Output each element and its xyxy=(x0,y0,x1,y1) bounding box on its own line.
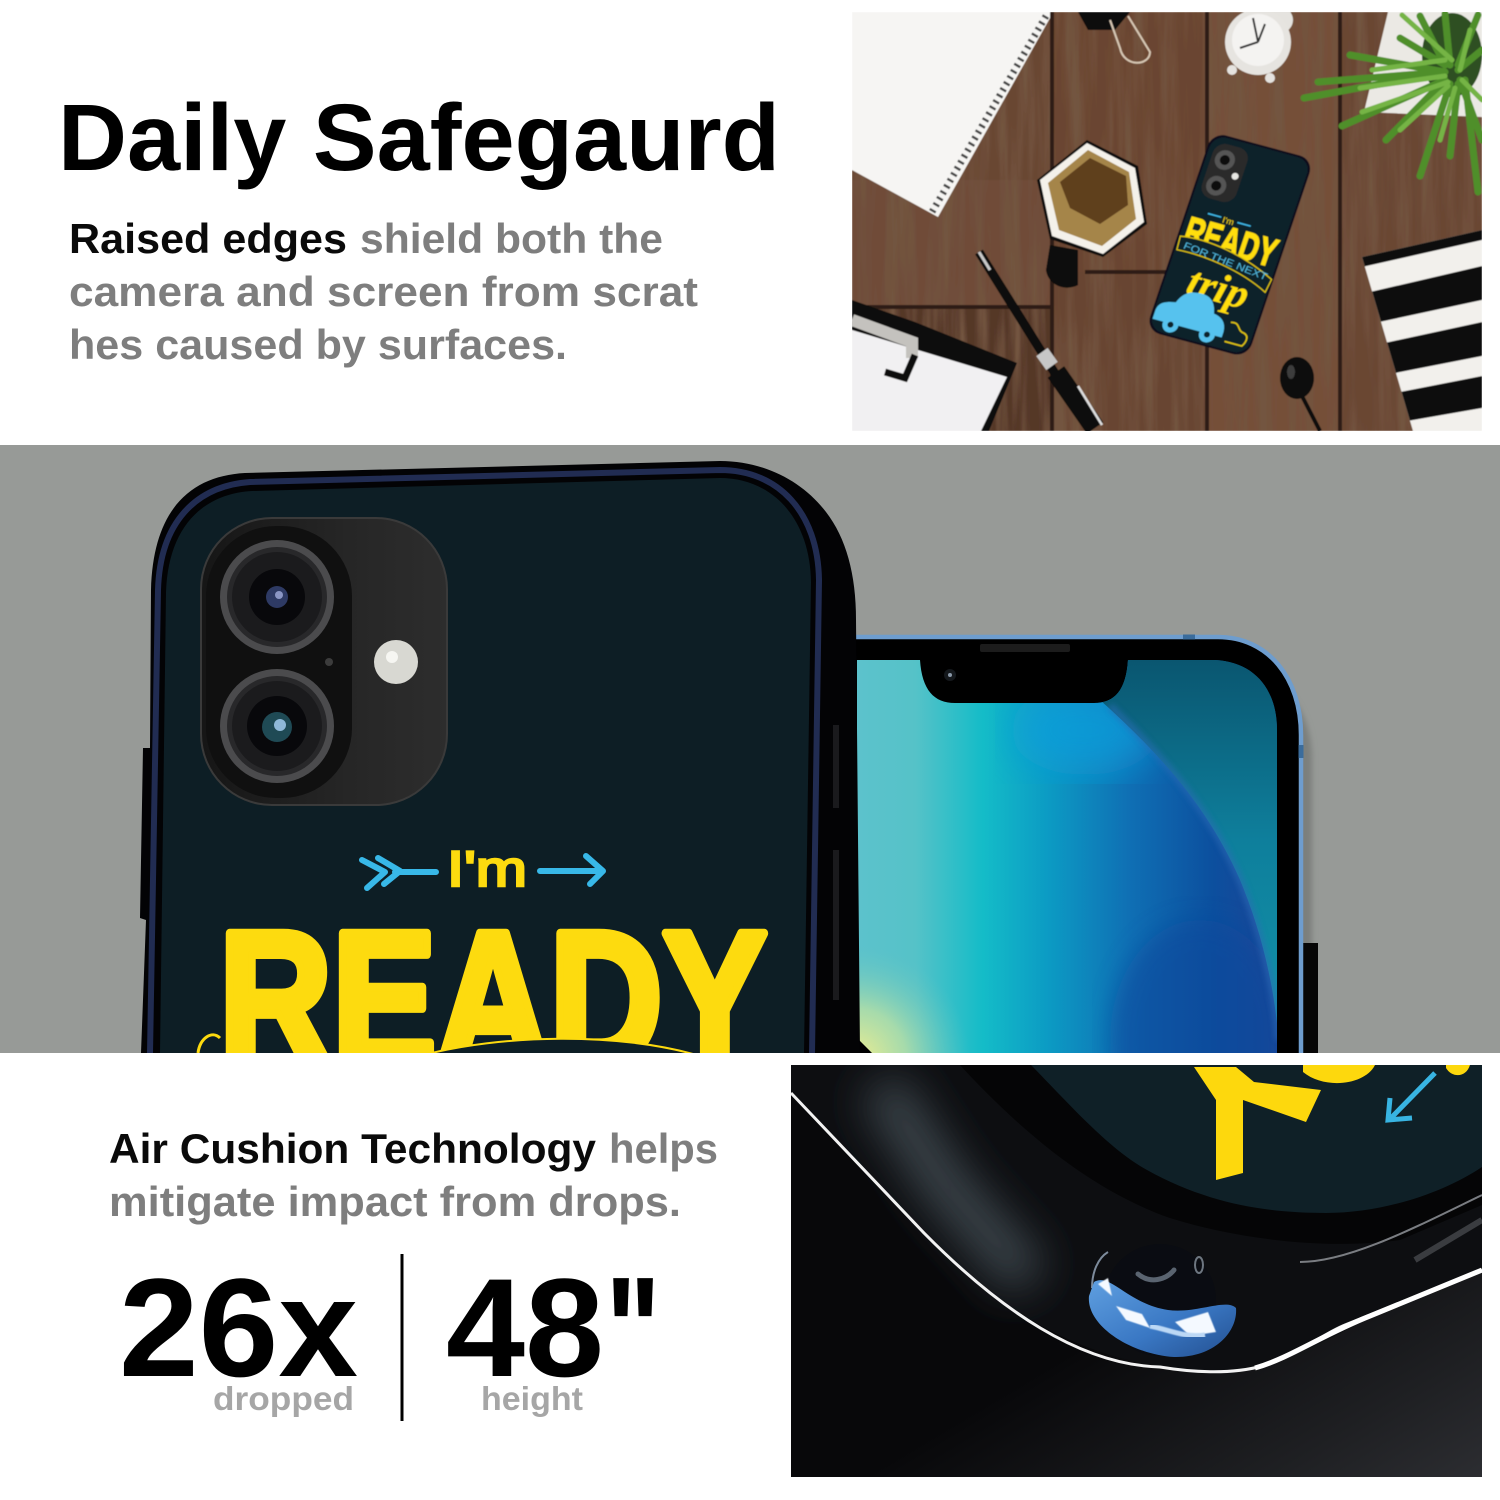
pen xyxy=(979,252,1102,428)
striped notebook xyxy=(1362,222,1482,431)
lens: top xyxy=(220,540,334,654)
water droplet xyxy=(1089,1244,1236,1357)
potted plant xyxy=(1304,12,1482,192)
speaker and front camera xyxy=(980,644,1070,652)
side port reflection xyxy=(1300,1195,1482,1262)
case art: READY lettering xyxy=(196,928,768,1053)
tilted phone case with design: trip xyxy=(1181,259,1255,319)
alarm clock xyxy=(1225,7,1293,83)
case back surface xyxy=(1031,1065,1482,1213)
case art: READY lettering: READY xyxy=(219,893,767,1105)
text block: raised edges description: Raised edges xyxy=(69,215,347,262)
stat: 26x dropped: dropped xyxy=(213,1380,354,1417)
tilted phone case with design: I'm xyxy=(1221,215,1235,227)
clipboard xyxy=(852,300,1017,431)
text block: air cushion technology: mitigate impact from drops. xyxy=(109,1178,681,1225)
blue arrow xyxy=(1388,1073,1435,1120)
car illustration xyxy=(1152,292,1225,344)
panel: close-up of case with water droplet xyxy=(791,1065,1482,1477)
panel: grey band with phones xyxy=(0,445,1500,1053)
text block: air cushion technology: helps xyxy=(609,1125,718,1172)
coffee cup xyxy=(1037,140,1147,288)
back phone case xyxy=(140,461,860,1105)
text block: air cushion technology xyxy=(109,1125,718,1225)
text block: air cushion technology: Air Cushion Technology xyxy=(109,1125,597,1172)
case art: I'm with arrows xyxy=(359,850,606,891)
flash xyxy=(374,640,418,684)
stat: 48 inches height: '' xyxy=(609,1249,657,1406)
text block: raised edges description: shield both the xyxy=(360,215,663,262)
camera module xyxy=(200,517,448,806)
tilted phone case with design: READY xyxy=(1178,209,1283,276)
stat: 48 inches height: 48 xyxy=(446,1249,604,1406)
yellow letter fragment xyxy=(1194,1065,1470,1180)
panel: desk lifestyle photo xyxy=(852,7,1482,431)
binder clip xyxy=(1078,12,1150,63)
microphone dot xyxy=(325,658,333,666)
stat: 26x dropped: 26x xyxy=(119,1249,358,1406)
text block: raised edges description: camera and screen from scrat xyxy=(69,268,698,315)
front phone with wallpaper xyxy=(856,634,1318,1053)
title: Daily Safegaurd: Daily Safegaurd xyxy=(58,85,780,191)
case bumper body xyxy=(1311,1247,1482,1347)
wallpaper screen xyxy=(857,660,1277,1053)
notebook xyxy=(852,12,1050,217)
side button xyxy=(1303,943,1318,1053)
tilted phone case with design: FOR THE NEXT xyxy=(1181,241,1269,283)
tilted phone case with design xyxy=(1145,132,1314,358)
text block: raised edges description: hes caused by surfaces. xyxy=(69,321,567,368)
wood planks xyxy=(852,12,1482,431)
text block: raised edges description xyxy=(69,215,698,368)
stat: 48 inches height xyxy=(446,1249,657,1417)
spoon xyxy=(1280,357,1320,431)
stat: 48 inches height: height xyxy=(481,1380,583,1417)
case art: I'm with arrows: I'm xyxy=(447,841,527,897)
white rim highlight xyxy=(791,1093,1482,1372)
lens: bottom xyxy=(220,669,334,783)
